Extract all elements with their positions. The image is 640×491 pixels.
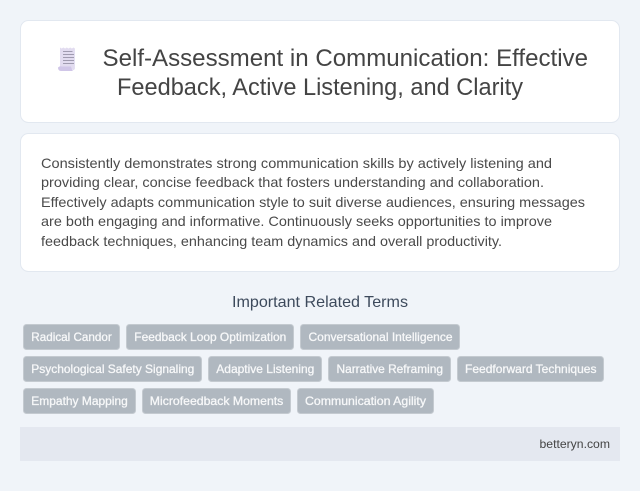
tag: Microfeedback Moments	[142, 388, 290, 414]
panel: summary paragraph: feedback techniques, enhancing team dynamics and overall productivity.	[41, 233, 502, 249]
tag list	[24, 324, 604, 414]
tag: Adaptive Listening: Adaptive Listening	[216, 362, 314, 376]
tag: Adaptive Listening	[208, 356, 322, 382]
tag: Conversational Intelligence	[300, 324, 460, 350]
tag: Microfeedback Moments: Microfeedback Moments	[150, 394, 283, 408]
tag: Psychological Safety Signaling	[24, 356, 202, 382]
tag: Conversational Intelligence: Conversational Intelligence	[308, 330, 453, 344]
tag: Narrative Reframing	[328, 356, 450, 382]
footer bar: betteryn.com	[540, 437, 610, 451]
panel: summary paragraph: Consistently demonstrates strong communication skills by actively listening and	[41, 155, 552, 171]
tag: Radical Candor: Radical Candor	[31, 330, 112, 344]
icon: document scroll	[58, 48, 75, 71]
tag: Narrative Reframing: Narrative Reframing	[336, 362, 443, 376]
heading	[102, 45, 588, 101]
tag: Empathy Mapping	[24, 388, 136, 414]
panel: summary paragraph: providing clear, concise feedback that fosters understanding and collaboration.	[41, 174, 544, 190]
tag: Empathy Mapping: Empathy Mapping	[31, 394, 128, 408]
heading: Feedback, Active Listening, and Clarity	[117, 74, 523, 101]
tag: Radical Candor	[24, 324, 120, 350]
tag: Communication Agility: Communication Agility	[305, 394, 426, 408]
tag: Feedforward Techniques: Feedforward Techniques	[465, 362, 596, 376]
heading: Self-Assessment in Communication: Effective	[102, 45, 588, 72]
panel: summary paragraph: are both engaging and informative. Continuously seeks opportunities to improve	[41, 213, 552, 229]
panel: summary paragraph: Effectively adapts communication style to suit diverse audiences, ensuring messages	[41, 194, 585, 210]
tag: Feedback Loop Optimization	[126, 324, 294, 350]
tag: Psychological Safety Signaling: Psychological Safety Signaling	[31, 362, 194, 376]
panel: summary paragraph	[20, 134, 620, 272]
tag: Communication Agility	[298, 388, 434, 414]
tag: Feedforward Techniques	[458, 356, 604, 382]
footer bar	[20, 427, 620, 461]
tag: Feedback Loop Optimization: Feedback Loop Optimization	[134, 330, 286, 344]
section heading: related terms: Important Related Terms	[232, 294, 408, 311]
panel: title card	[20, 20, 620, 122]
